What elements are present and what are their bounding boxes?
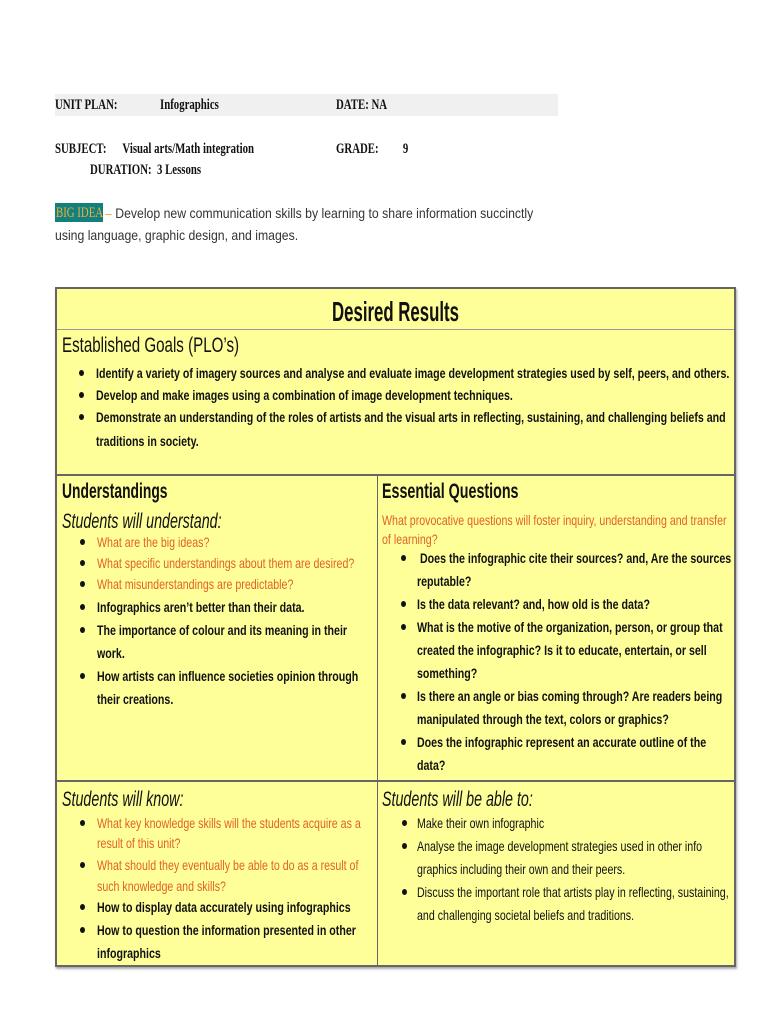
panel: understandings: The importance of colour and its meaning in their [97, 622, 347, 638]
panel: essential questions [382, 480, 731, 773]
big idea label [55, 203, 103, 222]
panel: understandings: Understandings [62, 480, 168, 503]
panel: students will know [62, 788, 361, 961]
panel: essential questions: What provocative questions will foster inquiry, understanding and transfer [382, 512, 727, 528]
panel: essential questions: reputable? [417, 573, 471, 589]
panel: students will be able to: Discuss the important role that artists play in reflecting, sustaining, [417, 884, 729, 900]
panel: understandings: Infographics aren’t better than their data. [97, 599, 305, 615]
panel: essential questions: of learning? [382, 531, 438, 547]
header: duration: DURATION: 3 Lessons [90, 162, 201, 178]
header: unit plan: UNIT PLAN: [55, 97, 118, 113]
panel: desired results table [55, 287, 736, 967]
header: topic: Infographics [160, 97, 219, 113]
goals list: Develop and make images using a combination of image development techniques. [96, 387, 513, 403]
panel: understandings: What misunderstandings are predictable? [97, 576, 293, 592]
title: Desired Results [332, 296, 459, 327]
panel: understandings: work. [97, 645, 125, 661]
header: subject: SUBJECT: Visual arts/Math integration [55, 141, 254, 157]
panel: students will know: result of this unit? [97, 835, 180, 851]
panel: understandings [62, 480, 358, 707]
panel: essential questions: What is the motive of the organization, person, or group that [417, 619, 723, 635]
panel: essential questions: created the infographic? Is it to educate, entertain, or sell [417, 642, 707, 658]
panel: students will be able to: Students will be able to: [382, 788, 533, 811]
panel: students will know: What should they eventually be able to do as a result of [97, 857, 358, 873]
panel: students will know: What key knowledge skills will the students acquire as a [97, 815, 361, 831]
panel: essential questions: manipulated through the text, colors or graphics? [417, 711, 669, 727]
panel: essential questions: Is the data relevant? and, how old is the data? [417, 596, 650, 612]
panel: understandings: Students will understand: [62, 510, 222, 533]
panel: students will be able to: Make their own infographic [417, 815, 544, 831]
heading: established goals: Established Goals (PLO’s) [62, 334, 239, 357]
big idea: – Develop new communication skills by learning to share information succinctly [105, 205, 533, 221]
panel: essential questions: data? [417, 757, 445, 773]
goals list: Demonstrate an understanding of the roles of artists and the visual arts in reflecting, sustaining, and challenging beliefs and [96, 409, 726, 425]
big idea: BIG IDEA [56, 205, 103, 221]
header: grade: GRADE: 9 [336, 141, 408, 157]
panel: understandings: their creations. [97, 691, 173, 707]
panel: essential questions: Does the infographic cite their sources? and, Are the sources [420, 550, 731, 566]
big idea: using language, graphic design, and images. [55, 227, 298, 243]
panel: understandings: What specific understandings about them are desired? [97, 555, 354, 571]
panel: understandings: What are the big ideas? [97, 534, 209, 550]
header: date: DATE: NA [336, 97, 387, 113]
panel: students will be able to: graphics including their own and their peers. [417, 861, 625, 877]
panel: students will know: Students will know: [62, 788, 183, 811]
panel: essential questions: something? [417, 665, 477, 681]
panel: understandings: How artists can influence societies opinion through [97, 668, 358, 684]
panel: students will know: such knowledge and skills? [97, 878, 226, 894]
panel: essential questions: Does the infographic represent an accurate outline of the [417, 734, 706, 750]
goals list: traditions in society. [96, 433, 199, 449]
big idea [55, 203, 534, 243]
goals list: Identify a variety of imagery sources and analyse and evaluate image development strategies used by self, peers, and others. [96, 365, 729, 381]
panel: students will be able to: and challenging societal beliefs and traditions. [417, 907, 634, 923]
panel: students will know: How to question the information presented in other [97, 922, 356, 938]
panel: students will be able to: Analyse the image development strategies used in other info [417, 838, 702, 854]
header bar [55, 94, 558, 116]
panel: essential questions: Is there an angle or bias coming through? Are readers being [417, 688, 722, 704]
panel: students will know: How to display data accurately using infographics [97, 899, 351, 915]
panel: students will be able to [382, 788, 729, 923]
panel: essential questions: Essential Questions [382, 480, 518, 503]
goals list [79, 365, 729, 449]
panel: students will know: infographics [97, 945, 161, 961]
